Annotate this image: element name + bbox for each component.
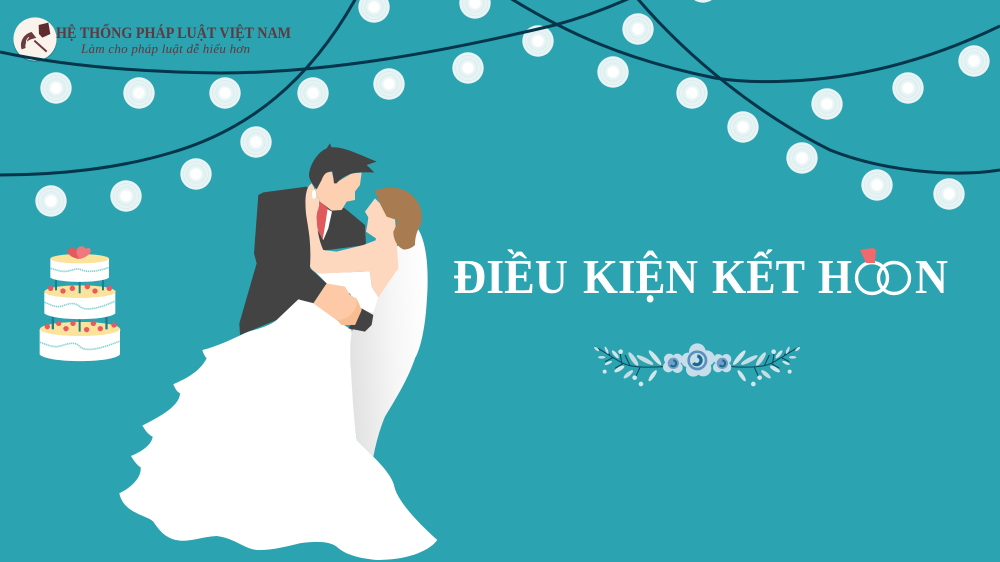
bottom tier berries xyxy=(45,321,117,332)
top tier xyxy=(50,254,109,282)
title word: KIỆN xyxy=(583,249,698,304)
groom suit xyxy=(239,187,366,335)
string lights xyxy=(0,0,1000,217)
groom hand xyxy=(313,283,362,325)
groom sleeve cuff xyxy=(348,308,373,332)
title word: H xyxy=(818,249,852,304)
title xyxy=(453,248,948,304)
floral ornament xyxy=(594,343,801,386)
site name: HỆ THỐNG PHÁP LUẬT VIỆT NAM xyxy=(56,22,291,42)
bottom tier xyxy=(40,322,120,361)
bride hair xyxy=(375,188,422,249)
bride head and back xyxy=(365,198,398,297)
groom shirt xyxy=(316,204,332,240)
wires xyxy=(0,0,1000,175)
bride earring xyxy=(312,190,316,199)
roses xyxy=(663,343,731,377)
logo badge xyxy=(13,17,57,62)
veil xyxy=(351,229,428,457)
groom tie xyxy=(317,201,328,240)
groom hand shadow xyxy=(337,300,362,325)
right branch xyxy=(730,346,801,386)
bride and groom xyxy=(119,143,437,560)
wedding cake xyxy=(40,246,120,361)
groom head xyxy=(315,172,362,211)
groom hair xyxy=(309,143,377,189)
title word: KẾT xyxy=(712,249,805,304)
left branch xyxy=(594,346,664,386)
middle tier berries xyxy=(48,284,112,294)
hearts topper xyxy=(68,246,91,259)
bulbs xyxy=(35,0,990,217)
title last letter: N xyxy=(915,249,948,304)
icon: wedding rings xyxy=(856,248,910,294)
bride arm xyxy=(305,183,397,274)
wedding dress skirt xyxy=(119,299,437,560)
tagline: Làm cho pháp luật dễ hiểu hơn xyxy=(80,41,250,56)
title word: ĐIỀU xyxy=(453,249,568,304)
middle tier xyxy=(44,285,116,319)
header text xyxy=(56,22,291,56)
bride bodice xyxy=(310,267,378,313)
upper pillars xyxy=(55,278,104,293)
lower pillars xyxy=(52,317,108,332)
